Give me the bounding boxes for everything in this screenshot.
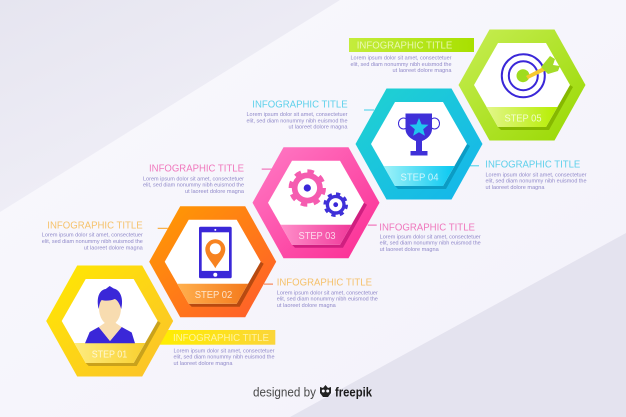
icon: phone with location pin bbox=[199, 227, 232, 278]
icon: person avatar bbox=[85, 286, 135, 343]
connector: step 2 right bbox=[264, 284, 273, 285]
text block: step 2 left description: Lorem ipsum dolor sit amet, consectetuer bbox=[42, 233, 143, 239]
text block: step 2 left description bbox=[42, 233, 143, 251]
panel: step 5 hexagon: STEP 05 bbox=[504, 114, 542, 124]
text block: step 2 right description bbox=[277, 290, 378, 309]
title: step 3 right: INFOGRAPHIC TITLE bbox=[379, 221, 475, 233]
text block: step 3 left description: elit, sed diam nonummy nibh euismod the bbox=[143, 183, 244, 189]
panel: step 1 hexagon: STEP 01 bbox=[92, 350, 128, 360]
text block: step 4 right description: elit, sed diam nonummy nibh euismod the bbox=[486, 179, 587, 185]
panel: step 5 title band: INFOGRAPHIC TITLE bbox=[357, 40, 452, 52]
connector: step 4 left bbox=[364, 110, 374, 111]
text block: step 5 description: elit, sed diam nonummy nibh euismod the bbox=[350, 62, 452, 68]
connector: step 3 right bbox=[368, 225, 377, 226]
text block: step 2 left description: ut laoreet dolore magna bbox=[84, 245, 143, 251]
text block: step 4 right description: Lorem ipsum dolor sit amet, consectetuer bbox=[486, 172, 587, 178]
text block: step 1 description bbox=[174, 348, 275, 367]
text block: step 4 left description bbox=[246, 112, 348, 131]
text block: step 2 right description: ut laoreet dolore magna bbox=[277, 303, 336, 309]
text block: step 5 description bbox=[350, 56, 452, 74]
text block: step 4 left description: Lorem ipsum dolor sit amet, consectetuer bbox=[246, 112, 348, 118]
title: step 4 right: INFOGRAPHIC TITLE bbox=[485, 159, 580, 171]
icon: target with dart bbox=[502, 54, 560, 97]
connector: step 4 right bbox=[469, 165, 479, 166]
panel: step 3 hexagon bbox=[252, 147, 380, 258]
icon: gears bbox=[291, 172, 346, 216]
text block: step 5 description: ut laoreet dolore magna bbox=[392, 68, 452, 74]
text block: step 3 left description bbox=[143, 176, 244, 195]
text block: step 3 right description bbox=[380, 234, 481, 253]
text block: step 3 right description: ut laoreet dolore magna bbox=[380, 247, 439, 253]
title: step 2 left: INFOGRAPHIC TITLE bbox=[47, 220, 143, 232]
text block: step 4 right description: ut laoreet dolore magna bbox=[486, 185, 545, 191]
icon: freepik logo bbox=[320, 385, 331, 397]
panel: step 1 hexagon bbox=[46, 266, 173, 376]
title: step 3 left: INFOGRAPHIC TITLE bbox=[149, 163, 244, 175]
panel: step 1 title band: INFOGRAPHIC TITLE bbox=[173, 332, 269, 344]
text block: step 4 left description: elit, sed diam nonummy nibh euismod the bbox=[246, 118, 348, 124]
text block: step 3 right description: elit, sed diam nonummy nibh euismod the bbox=[380, 241, 481, 247]
text block: step 2 right description: elit, sed diam nonummy nibh euismod the bbox=[277, 296, 378, 302]
connector: step 3 left bbox=[262, 169, 272, 170]
connector: step 2 left bbox=[158, 228, 168, 229]
text block: step 4 right description bbox=[486, 172, 587, 191]
credit: designed by freepik: designed by bbox=[253, 386, 317, 400]
credit: designed by freepik bbox=[253, 385, 372, 400]
title: step 4 left: INFOGRAPHIC TITLE bbox=[252, 98, 348, 110]
panel: step 5 hexagon bbox=[458, 30, 586, 140]
text block: step 1 description: ut laoreet dolore magna bbox=[174, 361, 233, 367]
text block: step 3 left description: Lorem ipsum dolor sit amet, consectetuer bbox=[143, 176, 244, 182]
text block: step 2 left description: elit, sed diam nonummy nibh euismod the bbox=[42, 239, 143, 245]
credit: designed by freepik: freepik bbox=[335, 386, 372, 400]
panel: step 4 hexagon bbox=[356, 88, 482, 200]
text block: step 2 right description: Lorem ipsum dolor sit amet, consectetuer bbox=[277, 290, 378, 296]
text block: step 1 description: Lorem ipsum dolor sit amet, consectetuer bbox=[174, 348, 275, 354]
icon: trophy bbox=[398, 114, 440, 156]
panel: step 2 hexagon bbox=[149, 206, 276, 317]
text block: step 4 left description: ut laoreet dolore magna bbox=[288, 125, 348, 131]
text block: step 3 left description: ut laoreet dolore magna bbox=[185, 189, 244, 195]
text block: step 3 right description: Lorem ipsum dolor sit amet, consectetuer bbox=[380, 234, 481, 240]
title: step 2 right: INFOGRAPHIC TITLE bbox=[277, 277, 372, 289]
panel: step 3 hexagon: STEP 03 bbox=[298, 231, 336, 242]
panel: step 2 hexagon: STEP 02 bbox=[195, 290, 233, 301]
text block: step 5 description: Lorem ipsum dolor sit amet, consectetuer bbox=[350, 56, 452, 62]
panel: step 4 hexagon: STEP 04 bbox=[400, 172, 439, 184]
text block: step 1 description: elit, sed diam nonummy nibh euismod the bbox=[174, 354, 275, 360]
